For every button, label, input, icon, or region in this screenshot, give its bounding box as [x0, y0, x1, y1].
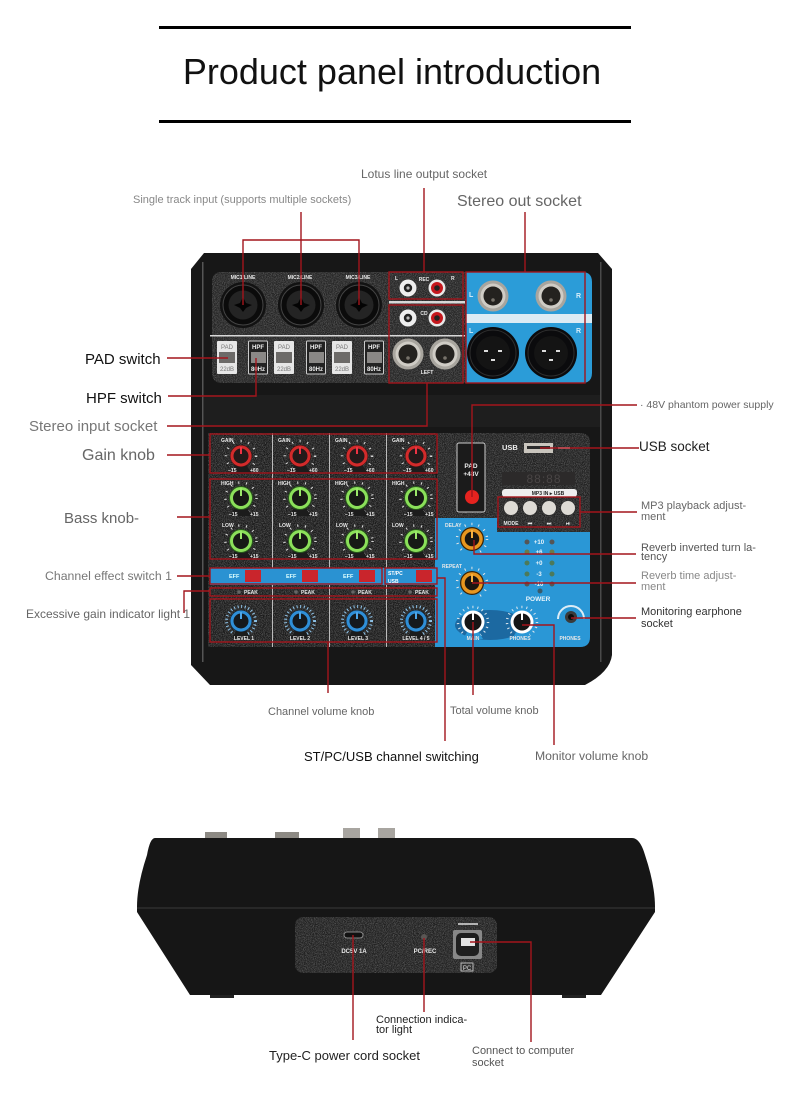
title: Product panel introduction — [183, 51, 601, 92]
rear connector panel: DC5V 1A — [341, 949, 367, 955]
level meter: POWER — [526, 596, 551, 603]
label: monitoring earphone socket: socket — [641, 618, 673, 630]
MP3 buttons — [502, 489, 577, 527]
label: connection indicator light: tor light — [376, 1024, 412, 1036]
label: lotus line output socket: Lotus line output socket — [361, 167, 488, 181]
channel strip panel — [208, 433, 436, 647]
EQ knobs: +15 — [366, 512, 375, 518]
phantom power switch — [457, 443, 485, 512]
peak lights: PEAK — [301, 590, 315, 596]
EQ knobs: −15 — [404, 512, 413, 518]
mixer body — [191, 253, 612, 685]
level meter: +6 — [536, 550, 543, 556]
leader lines — [167, 188, 639, 745]
MP3 buttons: MP3 IN ▸ USB — [532, 491, 565, 497]
EQ knobs — [221, 481, 434, 560]
level meter — [524, 540, 554, 603]
level knobs: LEVEL 3 — [348, 636, 368, 642]
stereo output panel: R — [576, 293, 581, 300]
effect switches: EFF — [286, 574, 297, 580]
effect switches: EFF — [229, 574, 240, 580]
MP3 buttons: MODE — [504, 521, 519, 527]
label: single track input: Single track input (supports multiple sockets) — [133, 194, 351, 206]
effect switches: EFF — [343, 574, 354, 580]
label: MP3 playback adjustment: ment — [641, 511, 665, 523]
title — [159, 26, 631, 123]
RCA and line sockets: CD — [420, 311, 428, 317]
label: monitor volume knob: Monitor volume knob — [535, 749, 648, 763]
master section — [435, 433, 590, 647]
peak lights: PEAK — [244, 590, 258, 596]
EQ knobs: HIGH — [278, 481, 291, 487]
gain knobs: GAIN — [221, 438, 234, 444]
gain knobs: GAIN — [278, 438, 291, 444]
PAD and HPF switches: HPF — [310, 345, 322, 351]
EQ knobs: HIGH — [392, 481, 405, 487]
gain knobs: −15 — [228, 468, 237, 474]
rear sockets on top edge — [205, 828, 395, 838]
PAD and HPF switches: 22dB — [277, 367, 291, 373]
EQ knobs: +15 — [425, 554, 434, 560]
rear leader lines — [353, 935, 531, 1042]
input socket panel: MIC1/LINE — [231, 275, 256, 281]
gain knobs: +60 — [309, 468, 318, 474]
level knobs: LEVEL 1 — [234, 636, 254, 642]
EQ knobs: −15 — [404, 554, 413, 560]
EQ knobs: LOW — [336, 523, 348, 529]
EQ knobs: +15 — [309, 512, 318, 518]
label: gain knob: Gain knob — [82, 447, 155, 464]
label: 48V phantom power supply: · 48V phantom power supply — [640, 399, 774, 411]
label: stereo input socket: Stereo input socket — [29, 418, 158, 435]
rear connector panel: PC/REC — [414, 949, 437, 955]
input socket panel — [210, 272, 466, 383]
PAD and HPF switches: 22dB — [220, 367, 234, 373]
PAD and HPF switches: 80Hz — [251, 367, 265, 373]
LED display — [502, 472, 575, 486]
label: connect to computer socket: Connect to computer — [472, 1045, 574, 1057]
RCA and line sockets: R — [451, 276, 455, 282]
stereo output panel: R — [576, 328, 581, 335]
mixer rear panel photo — [137, 828, 655, 998]
label: reverb time adjustment: Reverb time adjust- — [641, 570, 736, 582]
effect switches: USB — [388, 579, 399, 585]
stereo output panel — [466, 272, 592, 383]
EQ knobs: LOW — [279, 523, 291, 529]
RCA and line sockets: REC — [419, 277, 430, 283]
rear body — [137, 838, 655, 995]
label: excessive gain indicator: Excessive gain indicator light 1 — [26, 607, 190, 621]
stereo output panel: L — [469, 292, 474, 299]
rear feet — [210, 995, 586, 998]
peak lights — [237, 590, 429, 596]
peak lights: PEAK — [415, 590, 429, 596]
label: reverb inverted turn latency: Reverb inverted turn la- — [641, 542, 756, 554]
main, phones knobs and jack: PHONES — [559, 636, 581, 642]
EQ knobs: −15 — [229, 512, 238, 518]
PAD and HPF switches: 80Hz — [367, 367, 381, 373]
PAD and HPF switches: PAD — [278, 345, 291, 351]
EQ knobs: +15 — [250, 554, 259, 560]
gain knobs: GAIN — [335, 438, 348, 444]
label: HPF switch: HPF switch — [86, 390, 162, 407]
gain knobs: −15 — [287, 468, 296, 474]
EQ knobs: HIGH — [335, 481, 348, 487]
PAD and HPF switches — [217, 341, 384, 374]
input socket panel: MIC3/LINE — [346, 275, 371, 281]
main, phones knobs and jack: PHONES — [509, 636, 531, 642]
delay and repeat knobs — [442, 523, 487, 600]
EQ knobs: +15 — [309, 554, 318, 560]
PAD and HPF switches: 22dB — [335, 367, 349, 373]
input socket panel: MIC2/LINE — [288, 275, 313, 281]
main, phones knobs and jack: MAIN — [467, 636, 480, 642]
label: reverb inverted turn latency: tency — [641, 551, 668, 563]
RCA and line sockets: LEFT — [421, 370, 433, 376]
label: ST/PC/USB channel switching: ST/PC/USB channel switching — [304, 749, 479, 764]
stereo output panel: L — [469, 328, 474, 335]
label: Type-C power cord socket: Type-C power cord socket — [269, 1048, 420, 1063]
MP3 buttons: ⏮ — [528, 521, 533, 527]
label: MP3 playback adjustment: MP3 playback adjust- — [641, 500, 746, 512]
label: stereo out socket: Stereo out socket — [457, 193, 582, 210]
gain knobs: −15 — [344, 468, 353, 474]
level meter: +0 — [536, 561, 543, 567]
level meter: -3 — [536, 572, 542, 578]
main, phones knobs and jack — [458, 606, 584, 642]
label: USB socket: USB socket — [639, 439, 710, 454]
EQ knobs: −15 — [345, 554, 354, 560]
LED display: 88:88 — [526, 472, 562, 486]
gain knobs: +60 — [366, 468, 375, 474]
EQ knobs: −15 — [288, 512, 297, 518]
label: connection indicator light: Connection indica- — [376, 1014, 467, 1026]
label: connect to computer socket: socket — [472, 1057, 504, 1069]
level meter: +10 — [534, 540, 545, 546]
PAD and HPF switches: HPF — [252, 345, 264, 351]
EQ knobs: +15 — [366, 554, 375, 560]
EQ knobs: −15 — [229, 554, 238, 560]
delay and repeat knobs: DELAY — [445, 523, 462, 529]
gain knobs: GAIN — [392, 438, 405, 444]
effect switches — [210, 568, 437, 585]
MP3 buttons: ⏭ — [547, 521, 552, 527]
label: reverb time adjustment: ment — [641, 581, 665, 593]
mixer top panel photo — [191, 253, 612, 685]
level knobs: LEVEL 2 — [290, 636, 310, 642]
label: monitoring earphone socket: Monitoring earphone — [641, 606, 742, 618]
label: PAD switch: PAD switch — [85, 351, 161, 368]
EQ knobs: −15 — [345, 512, 354, 518]
MP3 buttons: ⏯ — [566, 521, 570, 527]
effect switches: ST/PC — [388, 571, 403, 577]
label: bass knob: Bass knob- — [64, 510, 139, 527]
rear connector panel: PC — [463, 966, 472, 972]
red callout frames — [210, 272, 585, 642]
phantom power switch: PAD — [464, 463, 478, 470]
peak lights: PEAK — [358, 590, 372, 596]
level knobs: LEVEL 4 / 5 — [402, 636, 430, 642]
label: total volume knob: Total volume knob — [450, 705, 539, 717]
gain knobs: +60 — [250, 468, 259, 474]
EQ knobs: +15 — [250, 512, 259, 518]
RCA and line sockets — [392, 276, 460, 376]
EQ knobs: HIGH — [221, 481, 234, 487]
delay and repeat knobs: REPEAT — [442, 564, 462, 570]
label: channel effect switch: Channel effect switch 1 — [45, 569, 172, 583]
rear connector panel — [295, 917, 497, 973]
EQ knobs: LOW — [392, 523, 404, 529]
gain knobs — [221, 438, 434, 474]
PAD and HPF switches: 80Hz — [309, 367, 323, 373]
RCA and line sockets: L — [395, 276, 398, 282]
label: channel volume knob: Channel volume knob — [268, 706, 374, 718]
level meter: -10 — [535, 582, 544, 588]
EQ knobs: +15 — [425, 512, 434, 518]
gain knobs: +60 — [425, 468, 434, 474]
level knobs — [226, 606, 430, 642]
EQ knobs: −15 — [288, 554, 297, 560]
USB port — [502, 443, 570, 453]
phantom power switch: +48V — [463, 471, 479, 478]
gain knobs: −15 — [403, 468, 412, 474]
EQ knobs: LOW — [222, 523, 234, 529]
PAD and HPF switches: HPF — [368, 345, 380, 351]
USB port: USB — [502, 443, 518, 452]
PAD and HPF switches: PAD — [336, 345, 349, 351]
PAD and HPF switches: PAD — [221, 345, 234, 351]
